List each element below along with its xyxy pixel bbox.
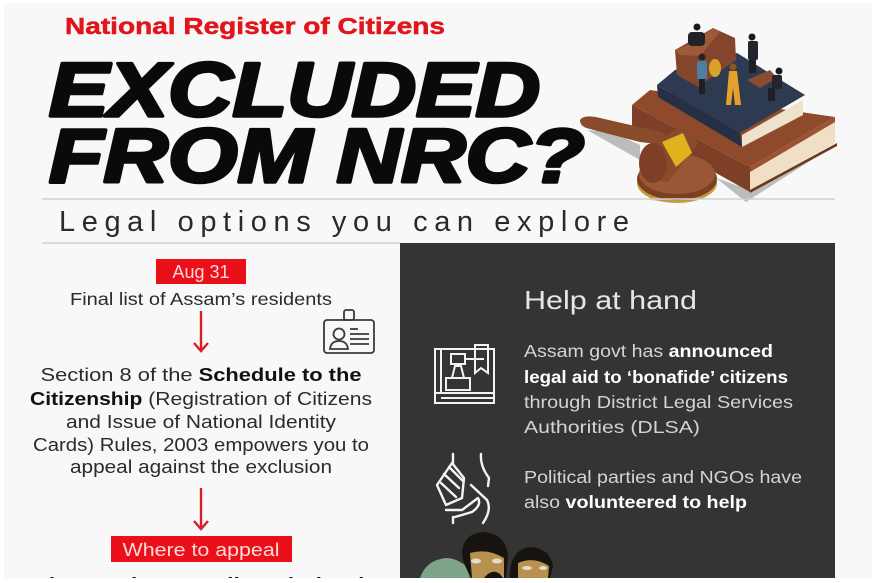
text: Section 8 paragraph — [30, 365, 372, 477]
judge bench — [675, 28, 736, 87]
panel: help at hand — [400, 243, 835, 578]
heading: Help at hand: Help at hand — [524, 285, 697, 315]
court figures — [688, 24, 782, 105]
text: Section 8 paragraph: appeal against the exclusion — [70, 457, 332, 477]
title: Excluded from NRC? — [49, 47, 585, 198]
arrow — [194, 311, 208, 351]
text: legal aid — [524, 341, 793, 437]
title: Excluded from NRC?: FROM NRC? — [49, 113, 585, 198]
badge: Where to appeal — [111, 536, 292, 562]
subtitle: Legal options you can explore: Legal options you can explore — [59, 206, 629, 238]
text: parties and NGOs: also volunteered to help — [524, 492, 747, 512]
divider — [42, 198, 835, 200]
text: Section 8 paragraph: Citizenship (Registration of Citizens — [30, 389, 372, 409]
icon: law book — [435, 345, 494, 403]
text: legal aid: Assam govt has announced — [524, 341, 773, 361]
lower brown book — [632, 90, 837, 193]
gavel — [580, 116, 717, 203]
illustration: two people — [420, 532, 553, 578]
text: legal aid: Authorities (DLSA) — [524, 417, 700, 437]
text: final list: Final list of Assam’s residents — [70, 289, 332, 309]
text: legal aid: through District Legal Services — [524, 392, 793, 412]
badge: Aug 31: Aug 31 — [172, 262, 230, 282]
icon: helping hands — [437, 454, 489, 523]
text: Section 8 paragraph: and Issue of National Identity — [66, 412, 336, 432]
text: Section 8 paragraph: Section 8 of the Schedule to the — [40, 365, 362, 385]
text: parties and NGOs: Political parties and NGOs have — [524, 467, 802, 487]
arrow — [194, 488, 208, 529]
title: Excluded from NRC?: EXCLUDED — [49, 47, 540, 132]
heading: National Register of Citizens: National Register of Citizens — [65, 13, 445, 39]
upper navy book — [657, 53, 805, 147]
icon: ID card — [324, 310, 374, 353]
badge: Aug 31 — [156, 259, 246, 284]
text: legal aid: legal aid to ‘bonafide’ citizens — [524, 367, 788, 387]
left column: appeal timeline — [30, 259, 374, 583]
divider — [42, 242, 400, 244]
bottom margin — [0, 578, 875, 583]
illustration: courtroom on law books with gavel — [580, 24, 838, 204]
text: parties and NGOs — [524, 467, 802, 512]
shadows — [587, 130, 838, 204]
text: Section 8 paragraph: Cards) Rules, 2003 empowers you to — [33, 435, 369, 455]
badge: Where to appeal: Where to appeal — [122, 540, 280, 560]
